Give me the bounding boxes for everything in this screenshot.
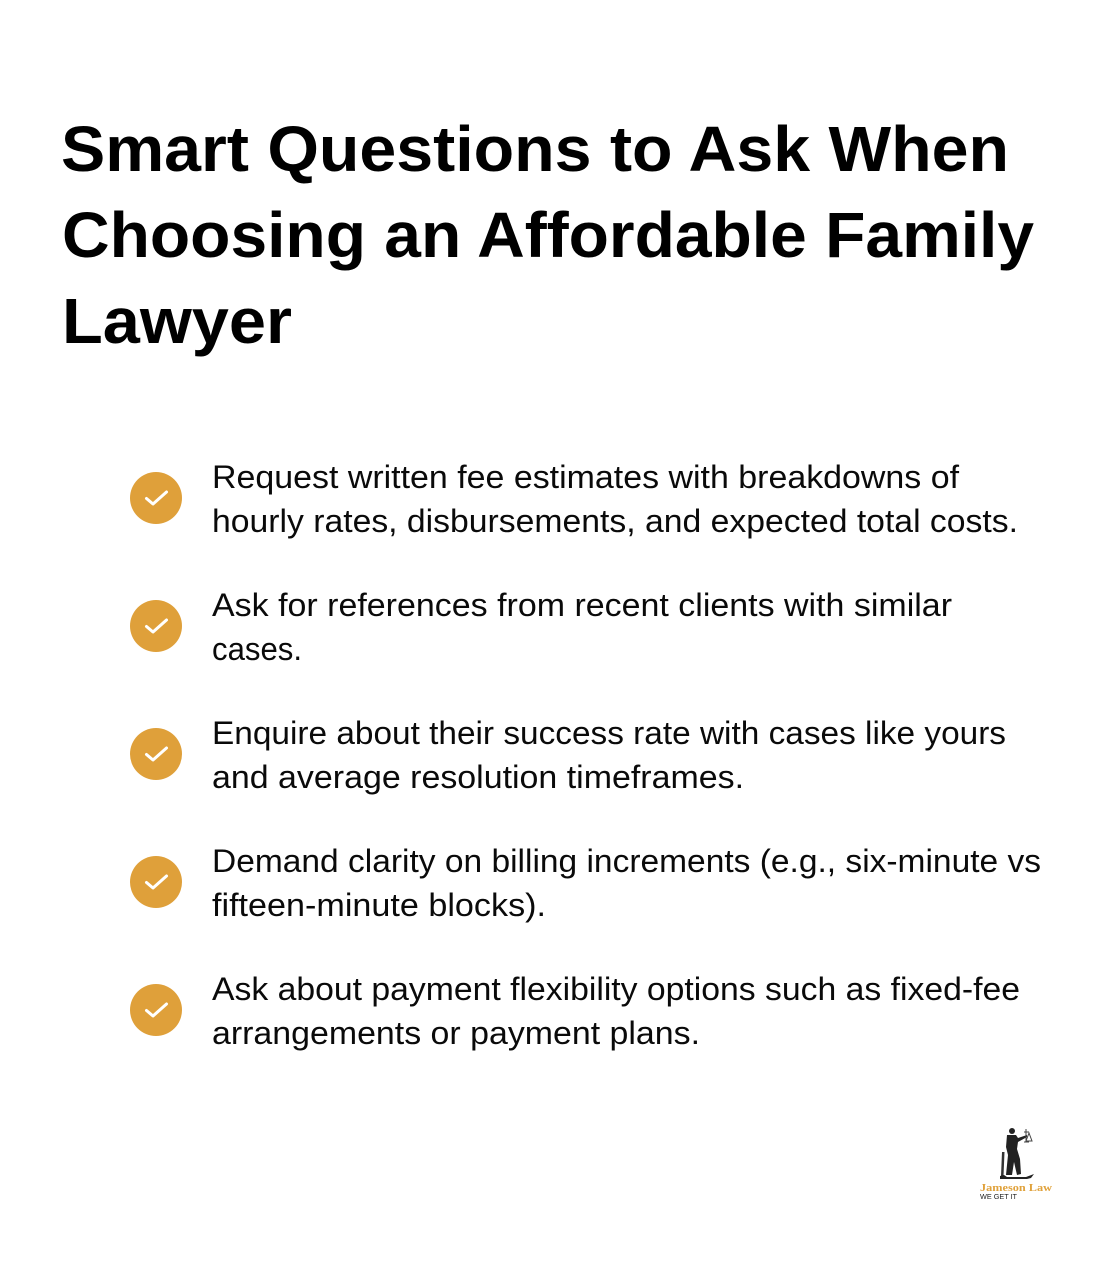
item 5 [130, 971, 1020, 1051]
text: item 3 [212, 715, 1006, 795]
item 3 [130, 715, 1006, 795]
icon: lady justice [1000, 1128, 1034, 1179]
text: logo tagline: WE GET IT [980, 1194, 1018, 1201]
icon: check circle 5 [130, 984, 182, 1036]
text: item 5: Ask about payment flexibility options such as fixed-fee [212, 971, 1020, 1007]
item 2 [130, 587, 952, 667]
text: item 4: fifteen-minute blocks). [212, 887, 546, 923]
text: logo name: Jameson Law [980, 1182, 1052, 1194]
checklist [130, 459, 1041, 1051]
text: item 3: Enquire about their success rate with cases like yours [212, 715, 1006, 751]
text: item 2 [212, 587, 952, 667]
icon: check circle 2 [130, 600, 182, 652]
text: item 1 [212, 459, 1018, 539]
text: item 1: Request written fee estimates with breakdowns of [212, 459, 959, 495]
title: Choosing an Affordable Family [62, 199, 1034, 271]
text: item 2: Ask for references from recent clients with similar [212, 587, 952, 623]
logo: Jameson Law [980, 1128, 1052, 1201]
text: item 1: hourly rates, disbursements, and expected total costs. [212, 503, 1018, 539]
item 1 [130, 459, 1018, 539]
icon: check circle 1 [130, 472, 182, 524]
title: Lawyer [62, 285, 292, 357]
text: item 4: Demand clarity on billing increments (e.g., six-minute vs [212, 843, 1041, 879]
title [61, 113, 1034, 357]
text: item 5: arrangements or payment plans. [212, 1015, 700, 1051]
text: item 3: and average resolution timeframes. [212, 759, 744, 795]
text: item 4 [212, 843, 1041, 923]
text: item 2: cases. [212, 631, 302, 667]
icon: check circle 4 [130, 856, 182, 908]
icon: check circle 3 [130, 728, 182, 780]
title: Smart Questions to Ask When [61, 113, 1009, 185]
item 4 [130, 843, 1041, 923]
text: item 5 [212, 971, 1020, 1051]
